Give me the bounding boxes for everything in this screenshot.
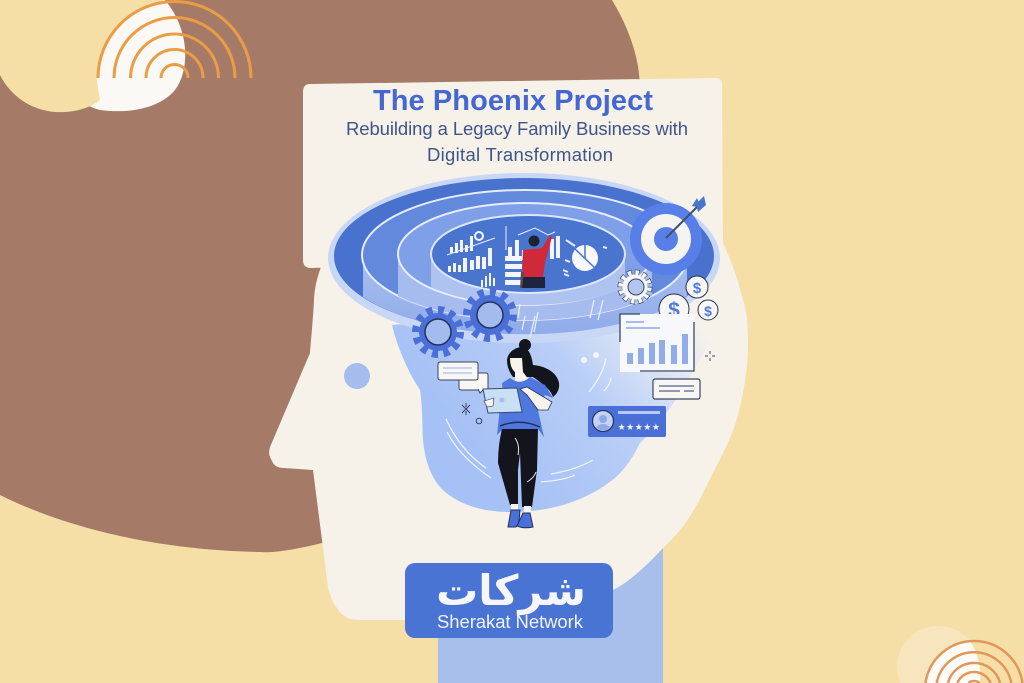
icon: gear centre (467, 292, 513, 338)
icon: white gear (621, 273, 649, 301)
bottom-right pale circle and arcs (897, 626, 1022, 683)
woman with tablet (483, 339, 559, 528)
icon: orange arcs top-left (98, 2, 251, 78)
logo arabic text: شركات (436, 566, 586, 616)
icon: dollar coins: $ (668, 299, 680, 322)
hair (507, 347, 559, 397)
maze terrace 1 wall (363, 255, 687, 334)
icon: gear left (416, 310, 460, 354)
arm (520, 387, 552, 410)
screen bar charts (448, 236, 560, 287)
top-left cream and white blob (0, 0, 185, 112)
maze terrace 2 floor (398, 203, 652, 305)
subtitle (346, 118, 688, 165)
logo english text: Sherakat Network (437, 611, 584, 632)
face and neck (510, 358, 529, 383)
logo badge (405, 563, 613, 638)
maze dashed details (518, 300, 603, 338)
review card (588, 406, 666, 437)
neck (438, 530, 663, 683)
ear dot (344, 363, 370, 389)
torso (497, 377, 553, 437)
spiral maze (328, 173, 720, 343)
speech bubbles (438, 362, 488, 393)
man in red shirt (520, 235, 552, 288)
maze terrace 2 wall (398, 254, 652, 320)
inner head blue area (392, 300, 710, 512)
decorative motion lines (446, 352, 611, 482)
head silhouette (269, 180, 748, 620)
maze terrace 1 floor (362, 190, 688, 320)
title: The Phoenix Project (373, 85, 653, 117)
subtitle: Rebuilding a Legacy Family Business with (346, 118, 688, 139)
icon: target with dart (630, 196, 706, 275)
hand (484, 398, 494, 407)
review card: ★★★★★ (618, 422, 660, 432)
small sparkle and ring (462, 403, 482, 424)
subtitle: Digital Transformation (427, 144, 613, 165)
icon: dollar coins: $ (693, 280, 702, 297)
screen pie chart (563, 240, 607, 276)
chart card (620, 314, 695, 372)
maze terrace 3 wall (431, 254, 625, 305)
brown background shape (0, 0, 640, 552)
central data screen (431, 215, 625, 293)
legs (498, 429, 538, 507)
note card (653, 379, 700, 399)
shoes (508, 510, 520, 527)
title panel (303, 78, 723, 268)
icon: dollar coins (659, 276, 718, 324)
tablet (483, 388, 522, 413)
icon: dollar coins: $ (704, 303, 712, 319)
icon: sparkle (705, 351, 715, 361)
